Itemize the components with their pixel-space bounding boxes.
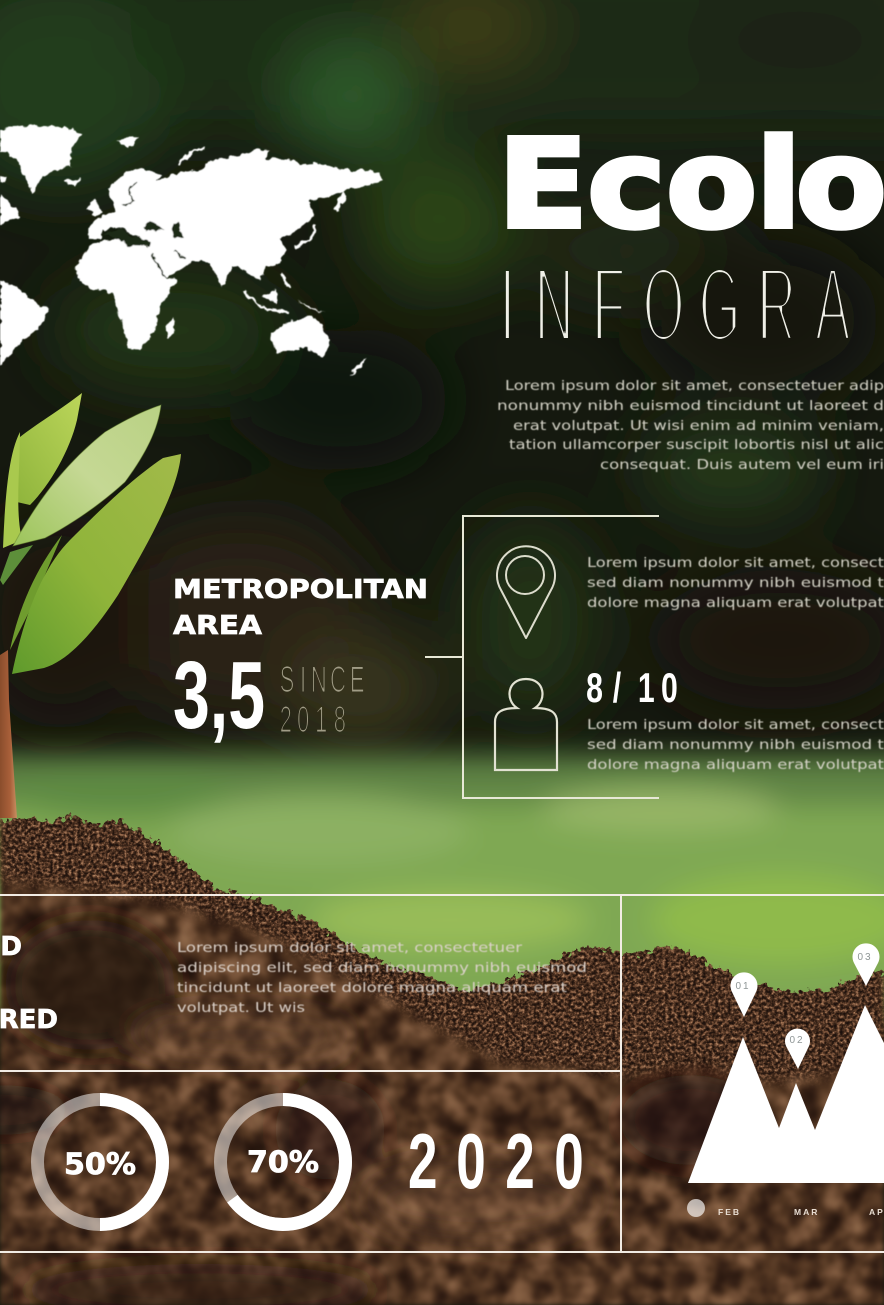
intro paragraph: nonummy nibh euismod tincidunt ut laoreet d — [497, 399, 884, 414]
mediterranean cutout — [103, 229, 152, 246]
since 2018 — [280, 659, 365, 740]
bracket frame — [425, 516, 659, 798]
person description — [587, 718, 884, 773]
marker 03: 03 — [857, 952, 873, 963]
metropolitan area heading: AREA — [173, 611, 262, 641]
marker 02 — [785, 1029, 810, 1069]
clipped labels — [0, 932, 58, 1035]
iceland — [65, 179, 80, 185]
since 2018: SINCE — [280, 659, 365, 700]
soil panel paragraph: Lorem ipsum dolor sit amet, consectetuer — [177, 941, 523, 956]
svalbard — [117, 137, 140, 148]
person description: Lorem ipsum dolor sit amet, consect — [587, 718, 884, 733]
soil panel paragraph: tincidunt ut laoreet dolore magna aliquam erat — [177, 981, 567, 996]
person description: dolore magna aliquam erat volutpat — [587, 758, 884, 773]
new guinea — [298, 300, 323, 313]
caspian sea cutout — [172, 222, 182, 238]
intro paragraph — [497, 379, 884, 473]
plant stem — [0, 650, 17, 818]
progress ring 70%: 70% — [247, 1145, 319, 1179]
month labels: MAR — [794, 1207, 819, 1217]
world map — [0, 125, 385, 375]
icon: location pin — [497, 546, 555, 638]
south america — [0, 282, 48, 367]
arctic island arc — [180, 149, 204, 165]
since 2018: 2018 — [280, 699, 346, 740]
intro paragraph: tation ullamcorper suscipit lobortis nisl ut alic — [509, 438, 884, 453]
pin description: dolore magna aliquam erat volutpat — [587, 596, 884, 611]
marker 03 — [853, 943, 879, 986]
clipped labels: RED — [0, 1005, 58, 1035]
new zealand — [350, 358, 367, 375]
lower small leaf — [0, 545, 33, 585]
intro paragraph: erat volutpat. Ut wisi enim ad minim veniam, — [513, 419, 884, 434]
progress ring 50% — [38, 1100, 162, 1224]
philippines — [282, 273, 288, 287]
pin description: sed diam nonummy nibh euismod t — [587, 576, 884, 591]
soil panel paragraph — [177, 941, 587, 1016]
united kingdom — [87, 197, 102, 217]
marker 01 — [730, 972, 758, 1017]
seedling plant — [0, 393, 181, 818]
marker 01: 01 — [735, 981, 751, 992]
australia — [270, 317, 330, 358]
greenland — [0, 125, 82, 193]
back left leaf — [8, 393, 82, 505]
soil panel paragraph: volutpat. Ut wis — [177, 1001, 305, 1016]
year 2020: 2020 — [408, 1119, 584, 1206]
metropolitan area heading: METROPOLITAN — [173, 575, 428, 605]
metric 3,5: 3,5 — [173, 642, 265, 749]
progress ring 70% — [220, 1100, 346, 1225]
soil ground — [0, 800, 884, 1305]
eurasia — [88, 148, 385, 287]
intro paragraph: Lorem ipsum dolor sit amet, consectetuer adip — [505, 379, 884, 394]
mountain chart — [687, 943, 884, 1217]
madagascar — [166, 317, 175, 338]
legend dot — [687, 1199, 705, 1217]
borneo — [263, 288, 277, 303]
kamchatka — [335, 192, 347, 212]
icon: person — [495, 679, 557, 770]
pin description: Lorem ipsum dolor sit amet, consect — [587, 556, 884, 571]
intro paragraph: consequat. Duis autem vel eum iri — [600, 458, 884, 473]
progress ring 50%: 50% — [64, 1147, 136, 1181]
small rear leaf — [10, 535, 62, 650]
clipped labels: D — [0, 932, 22, 962]
mountain peaks — [688, 1005, 884, 1183]
marker 02: 02 — [789, 1035, 805, 1046]
north america fragment — [0, 195, 20, 225]
japan — [295, 225, 315, 247]
large front leaf — [12, 454, 181, 674]
narrow left leaf — [3, 432, 22, 548]
pin description — [587, 556, 884, 611]
panel grid lines — [0, 895, 884, 1252]
month labels — [718, 1207, 884, 1217]
africa — [77, 238, 177, 350]
pale middle leaf — [13, 405, 161, 546]
soil panel paragraph: adipiscing elit, sed diam nonummy nibh euismod — [177, 961, 587, 976]
metropolitan area heading — [173, 575, 428, 641]
person description: sed diam nonummy nibh euismod t — [587, 738, 884, 753]
month labels: FEB — [718, 1207, 741, 1217]
red sea cutout — [123, 181, 185, 277]
metric 8/10: 8/10 — [586, 664, 678, 711]
north america islet — [0, 175, 7, 182]
sumatra and java — [245, 290, 290, 312]
black sea cutout — [143, 222, 163, 231]
